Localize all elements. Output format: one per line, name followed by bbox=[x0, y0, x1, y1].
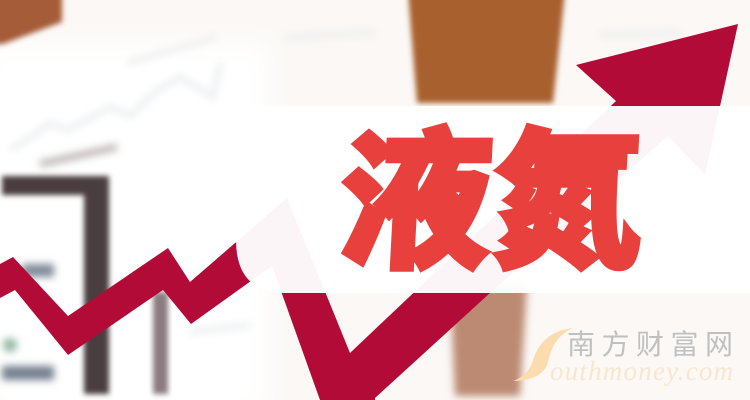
watermark logo bbox=[513, 328, 740, 386]
title text: 液氮 bbox=[336, 119, 647, 288]
logo swoosh bbox=[513, 328, 573, 381]
white title panel bbox=[236, 106, 750, 293]
logo domain: outhmoney.com bbox=[550, 356, 734, 386]
brown block top left bbox=[0, 0, 62, 44]
white document area bbox=[0, 40, 270, 400]
phone screen items bbox=[2, 264, 54, 380]
logo Chinese name: 南方财富网 bbox=[567, 329, 740, 360]
brown cup top centre bbox=[408, 0, 565, 103]
dark diagonal shadow bbox=[40, 147, 117, 164]
brown cup lower bbox=[450, 285, 527, 396]
grey vertical bar bbox=[153, 292, 168, 394]
faint chart sketch bbox=[10, 32, 680, 332]
dark phone frame bbox=[2, 176, 109, 394]
